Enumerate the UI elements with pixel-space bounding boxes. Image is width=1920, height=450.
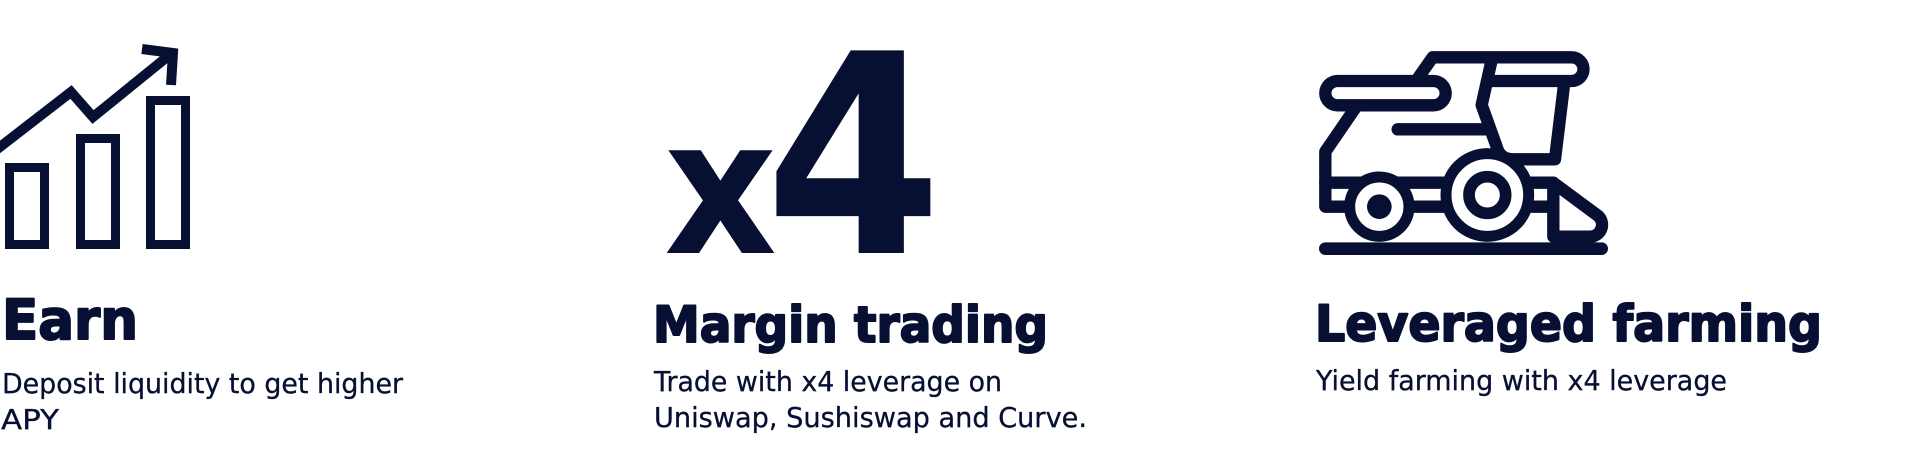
icon: x4 multiplier: 4 — [765, 0, 942, 319]
icon: rising bar chart with arrow — [0, 49, 186, 244]
text: earn description: APY — [1, 403, 60, 436]
panel: margin trading — [653, 0, 1087, 434]
icon: x4 multiplier — [664, 0, 942, 319]
text: leveraged farming description: Yield farming with x4 leverage — [1315, 364, 1727, 397]
text: margin trading description: Uniswap, Sushiswap and Curve. — [654, 401, 1087, 434]
heading: leveraged farming: Leveraged farming — [1315, 295, 1822, 353]
text: earn description — [1, 367, 403, 436]
heading: margin trading: Margin trading — [653, 296, 1048, 354]
text: earn description: Deposit liquidity to get higher — [2, 367, 403, 400]
text: margin trading description: Trade with x4 leverage on — [653, 365, 1002, 398]
icon: combine harvester — [1325, 57, 1602, 249]
heading: earn: Earn — [2, 288, 138, 352]
panel: earn — [0, 49, 403, 436]
icon: x4 multiplier: x — [664, 79, 777, 298]
text: margin trading description — [653, 365, 1087, 434]
panel: leveraged farming — [1315, 57, 1822, 397]
